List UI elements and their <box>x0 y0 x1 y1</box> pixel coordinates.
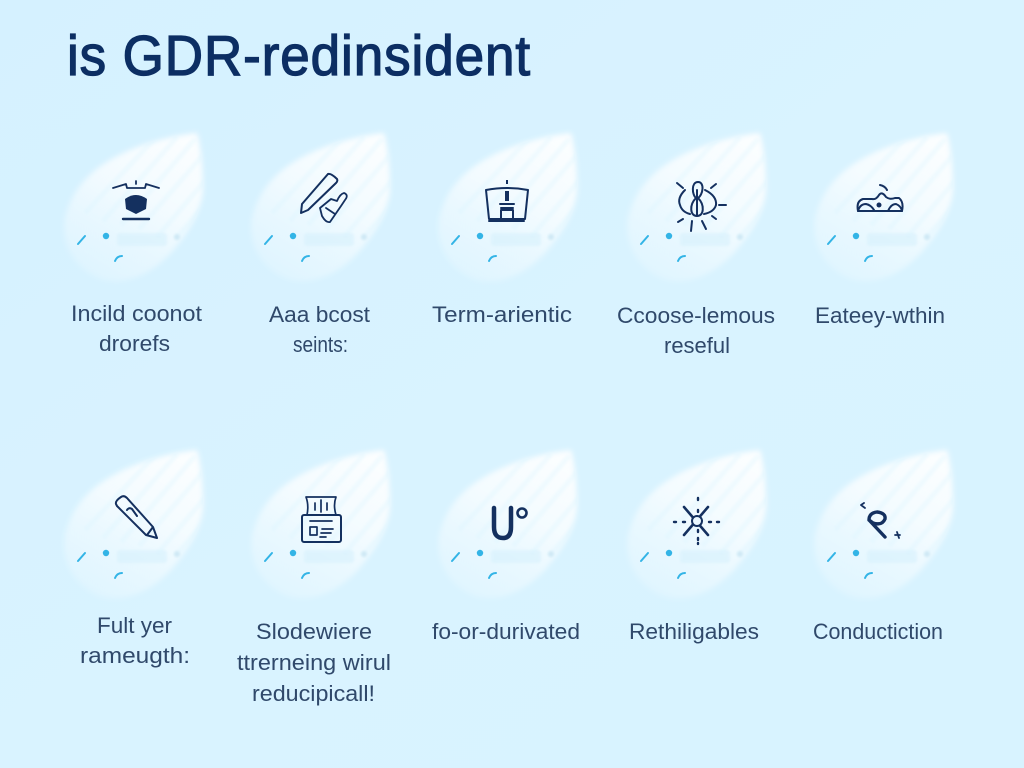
icon: sparkle burst <box>674 498 720 544</box>
icon: pencil <box>116 496 157 538</box>
label: Slodewiere turneing wirul reducipicall: reducipicall! <box>252 681 375 706</box>
label: Slodewiere turneing wirul reducipicall: Slodewiere <box>256 619 372 644</box>
card: Term-arientic <box>432 133 594 327</box>
label: Ccoose-lemous reseful: Ccoose-lemous <box>617 303 775 328</box>
label: Fult yer rameugth: rameugth: <box>80 643 190 668</box>
icon: U degree glyph <box>494 508 526 538</box>
label: Term-arientic: Term-arientic <box>432 302 572 327</box>
label: Rethiligables: Rethiligables <box>629 619 759 644</box>
label: Incild coonot drorefs: Incild coonot <box>71 301 203 326</box>
label: Conductiction: Conductiction <box>813 619 943 644</box>
label: Slodewiere turneing wirul reducipicall <box>237 619 391 706</box>
icon: pen and note <box>301 174 347 222</box>
label: Aaa bcost seints <box>269 302 371 357</box>
label: Aaa bcost seints: seints: <box>293 332 348 357</box>
card: fo-or-durivated <box>432 450 594 644</box>
label: Slodewiere turneing wirul reducipicall: ttrerneing wirul <box>237 650 391 675</box>
label: Ccoose-lemous reseful: reseful <box>664 333 730 358</box>
label: Incild coonot drorefs <box>71 301 203 356</box>
label: Incild coonot drorefs: drorefs <box>99 331 170 356</box>
card: Ccoose-lemous reseful <box>617 133 783 358</box>
card: Conductiction <box>813 450 970 644</box>
label: Fult yer rameugth: Fult yer <box>97 613 173 638</box>
label: fo-or-durivated: fo-or-durivated <box>432 619 580 644</box>
card: Aaa bcost seints <box>251 133 407 357</box>
card: Rethiligables <box>627 450 783 644</box>
icon: e glyph with sparks <box>861 503 900 538</box>
icon: framed terminal <box>486 180 528 221</box>
card: Eateey-wthin <box>814 133 970 328</box>
label: Eateey-wthin: Eateey-wthin <box>815 303 945 328</box>
icon: vehicle outline <box>858 185 903 211</box>
card: Fult yer rameugth <box>64 450 220 668</box>
label: Ccoose-lemous reseful <box>617 303 775 358</box>
icon: document box <box>302 497 341 542</box>
title: is GDR-redinsident <box>67 23 530 87</box>
label: Aaa bcost seints: Aaa bcost <box>269 302 371 327</box>
card: Slodewiere turneing wirul reducipicall <box>237 450 407 706</box>
label: Fult yer rameugth <box>80 613 190 668</box>
icon: shield with hanger <box>113 181 159 219</box>
card: Incild coonot drorefs <box>64 133 220 356</box>
icon: radiant bulb <box>677 182 726 231</box>
